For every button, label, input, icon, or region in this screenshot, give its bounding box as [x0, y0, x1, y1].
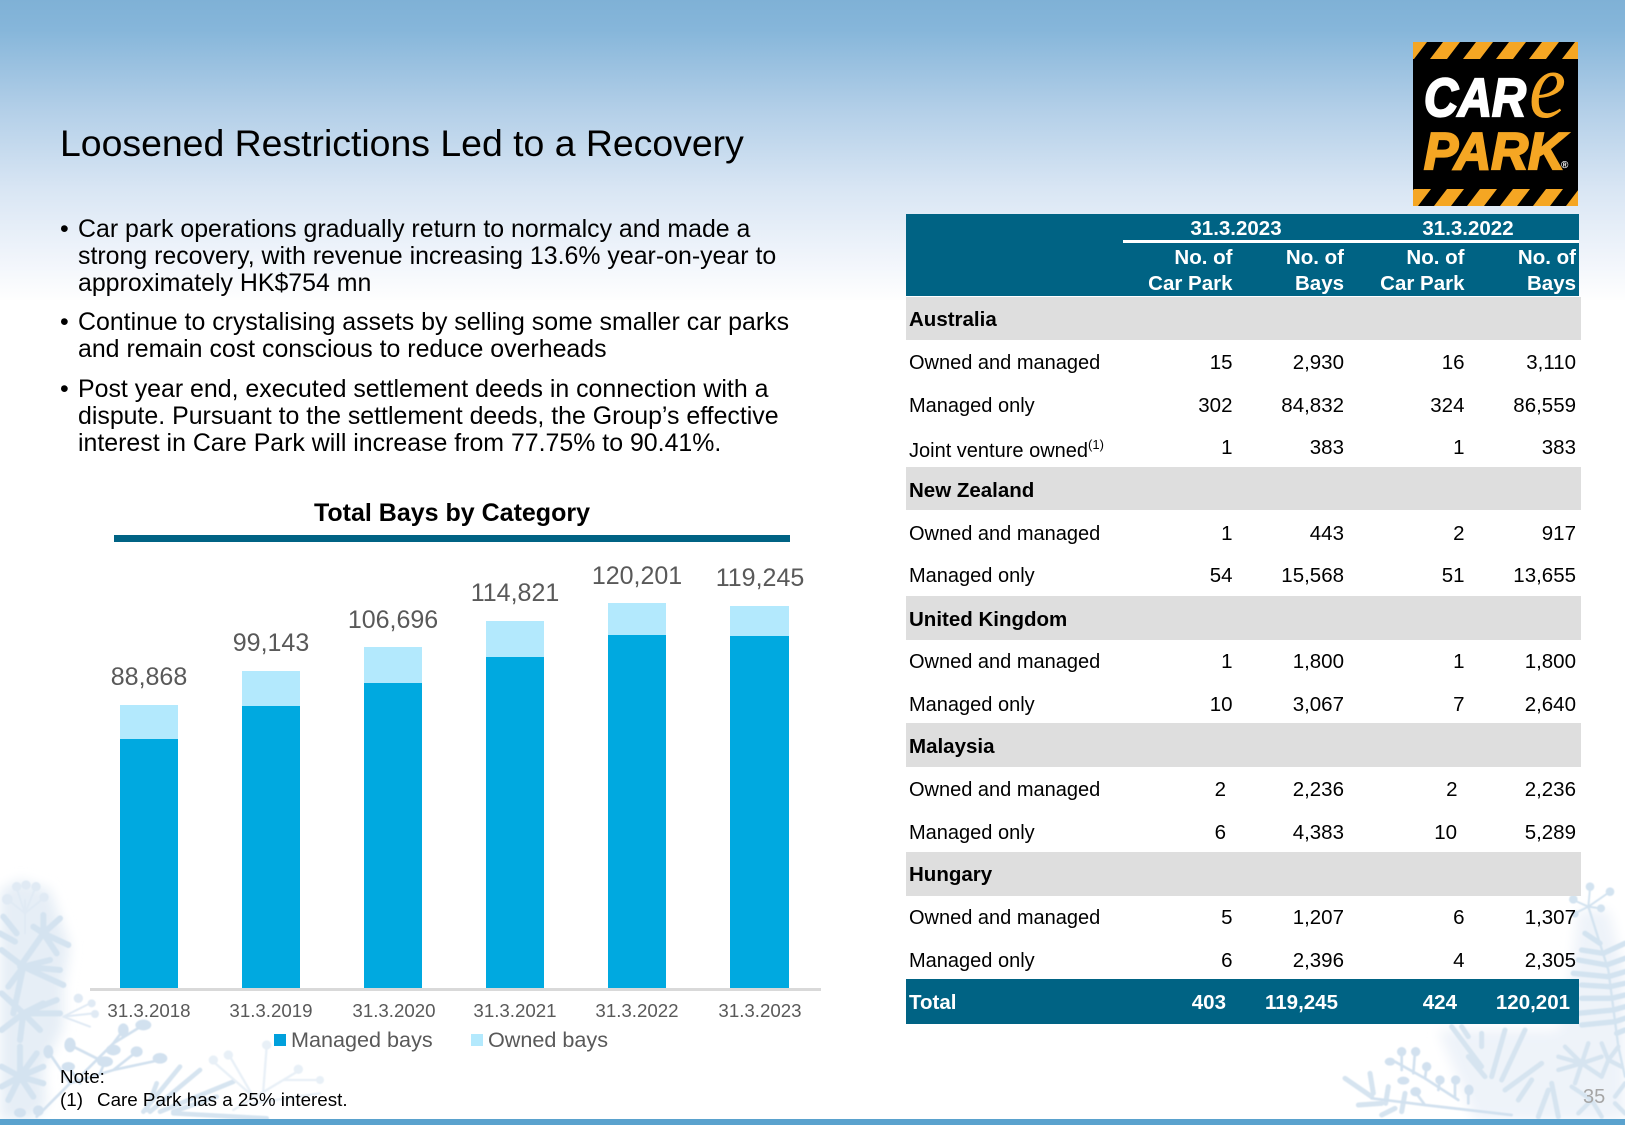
row: Malaysia managed only: 6	[1215, 821, 1226, 844]
bullet: crystalising assets: Continue to crystalising assets by selling some smaller car parks	[78, 308, 789, 336]
row: United Kingdom managed only: Managed only	[909, 694, 1035, 716]
legend: owned bays: Owned bays	[488, 1027, 608, 1052]
title: Loosened Restrictions Led to a Recovery	[60, 122, 744, 164]
row: Australia joint venture owned: 383	[1310, 436, 1344, 459]
page number: 35	[1583, 1086, 1605, 1108]
row: United Kingdom managed only: 3,067	[1293, 693, 1344, 716]
axis line	[90, 988, 821, 991]
row: United Kingdom	[906, 596, 1581, 640]
row: Malaysia owned and managed: 2	[1446, 778, 1458, 801]
header: no. of car park 2023	[1148, 246, 1232, 295]
bar 31.3.2023	[730, 606, 789, 988]
bar 31.3.2019	[242, 671, 300, 988]
row: Malaysia: Malaysia	[909, 735, 994, 758]
row: New Zealand managed only: 51	[1442, 564, 1464, 587]
row: New Zealand owned and managed: 1	[1221, 522, 1232, 545]
row: Hungary owned and managed: Owned and managed	[909, 907, 1100, 929]
row: Hungary	[906, 852, 1581, 896]
row: Malaysia owned and managed: 2,236	[1293, 778, 1344, 801]
row: Hungary owned and managed: 5	[1221, 906, 1232, 929]
row: United Kingdom owned and managed	[909, 650, 1576, 673]
row: United Kingdom owned and managed: 1,800	[1525, 650, 1576, 673]
header date 31.3.2023: 31.3.2023	[1190, 217, 1282, 240]
value label 99,143: 99,143	[233, 629, 309, 657]
row: Malaysia owned and managed: 2,236	[1525, 778, 1576, 801]
row: New Zealand managed only	[909, 564, 1576, 587]
bar 31.3.2021	[486, 621, 544, 988]
header rule	[1123, 240, 1579, 243]
row: New Zealand owned and managed: 917	[1542, 522, 1576, 545]
header date 31.3.2022: 31.3.2022	[1422, 217, 1514, 240]
chart heading: Total Bays by Category	[314, 499, 590, 527]
row: Total	[906, 979, 1579, 1024]
bullet: settlement deeds	[60, 375, 779, 457]
row: Australia owned and managed: 2,930	[1293, 351, 1344, 374]
row: United Kingdom managed only: 2,640	[1525, 693, 1576, 716]
row: New Zealand managed only: 54	[1210, 564, 1232, 587]
text: Care Park has a 25% interest.	[97, 1089, 348, 1110]
row: Hungary managed only: Managed only	[909, 950, 1035, 972]
bullet: crystalising assets: and remain cost conscious to reduce overheads	[78, 335, 607, 363]
axis label 31.3.2018: 31.3.2018	[107, 1000, 191, 1021]
header: no. of bays 2023: No. of	[1286, 246, 1344, 269]
row: Hungary managed only: 2,305	[1525, 949, 1576, 972]
row: Australia joint venture owned	[909, 436, 1576, 462]
row: Malaysia managed only: 10	[1434, 821, 1457, 844]
header: no. of bays 2022: Bays	[1527, 272, 1576, 295]
row: Hungary managed only: 4	[1453, 949, 1464, 972]
panel: car park table	[906, 214, 1581, 1024]
bullet: settlement deeds: Post year end, executed settlement deeds in connection with a	[78, 375, 768, 403]
value label 119,245: 119,245	[716, 564, 804, 592]
legend	[274, 1027, 608, 1052]
row: Malaysia managed only: 5,289	[1525, 821, 1576, 844]
bullet: car park recovery: •	[60, 214, 69, 242]
header: no. of car park 2023: Car Park	[1148, 272, 1232, 295]
row: Australia joint venture owned: 1	[1453, 436, 1464, 459]
axis label 31.3.2023: 31.3.2023	[718, 1000, 802, 1021]
row: Malaysia owned and managed: 2	[1215, 778, 1226, 801]
bullet: crystalising assets	[60, 308, 789, 363]
header: no. of bays 2023	[1286, 246, 1344, 295]
bullet: settlement deeds: dispute. Pursuant to the settlement deeds, the Group’s effective	[78, 402, 779, 430]
row: United Kingdom managed only: 10	[1210, 693, 1232, 716]
row: Australia owned and managed: 3,110	[1526, 351, 1576, 374]
value label 88,868: 88,868	[111, 663, 187, 691]
row: New Zealand owned and managed	[909, 522, 1576, 545]
row: New Zealand managed only: Managed only	[909, 565, 1035, 587]
row: United Kingdom owned and managed: Owned and managed	[909, 651, 1100, 673]
row: Hungary owned and managed: 6	[1453, 906, 1464, 929]
logo: Care Park: CAR	[1424, 68, 1526, 128]
value label 120,201: 120,201	[592, 562, 682, 590]
row: New Zealand managed only: 13,655	[1513, 564, 1576, 587]
footnote: Note:	[60, 1066, 105, 1087]
footnote	[60, 1066, 348, 1110]
row: Australia joint venture owned: 1	[1221, 436, 1232, 459]
row: Malaysia owned and managed: Owned and managed	[909, 779, 1100, 801]
row: United Kingdom owned and managed: 1,800	[1293, 650, 1344, 673]
row: Australia	[906, 297, 1581, 340]
header: no. of bays 2022	[1518, 246, 1576, 295]
row: Total: 424	[1423, 991, 1457, 1014]
logo: Care Park	[1413, 42, 1578, 206]
header: no. of car park 2023: No. of	[1174, 246, 1232, 269]
row: Australia managed only: Managed only	[909, 395, 1035, 417]
row: Total: 119,245	[1265, 991, 1338, 1014]
row: Australia managed only: 84,832	[1281, 394, 1344, 417]
row: Total: 120,201	[1496, 991, 1570, 1014]
legend: managed bays: Managed bays	[291, 1027, 433, 1052]
row: Australia owned and managed: 16	[1442, 351, 1464, 374]
row: Australia managed only: 324	[1430, 394, 1464, 417]
footnote: (1)	[60, 1089, 83, 1110]
header: no. of car park 2022: No. of	[1406, 246, 1464, 269]
bottom bar	[0, 1119, 1625, 1125]
bullet: crystalising assets: •	[60, 308, 69, 336]
row: Malaysia owned and managed	[909, 778, 1576, 801]
row: Australia owned and managed: 15	[1210, 351, 1232, 374]
header: no. of car park 2022	[1380, 246, 1464, 295]
row: Total: Total	[909, 991, 956, 1014]
row: Hungary managed only: 2,396	[1293, 949, 1344, 972]
axis label 31.3.2020: 31.3.2020	[352, 1000, 436, 1021]
row: Malaysia	[906, 723, 1581, 767]
header: no. of bays 2023: Bays	[1295, 272, 1344, 295]
row: Hungary owned and managed: 1,307	[1525, 906, 1576, 929]
bullet: car park recovery: Car park operations gradually return to normalcy and made a	[78, 214, 750, 242]
row: New Zealand owned and managed: Owned and managed	[909, 523, 1100, 545]
heading rule	[114, 535, 790, 542]
bullet list	[60, 214, 789, 457]
bar 31.3.2018	[120, 705, 178, 988]
row: Australia owned and managed	[909, 351, 1576, 374]
row: New Zealand owned and managed: 2	[1453, 522, 1464, 545]
row: Australia: Australia	[909, 308, 997, 331]
row: United Kingdom owned and managed: 1	[1221, 650, 1232, 673]
row: New Zealand owned and managed: 443	[1310, 522, 1344, 545]
row: United Kingdom owned and managed: 1	[1453, 650, 1464, 673]
row: Malaysia managed only: Managed only	[909, 822, 1035, 844]
row: New Zealand: New Zealand	[909, 479, 1034, 502]
value label 114,821: 114,821	[471, 579, 559, 607]
axis label 31.3.2022: 31.3.2022	[595, 1000, 679, 1021]
row: Australia managed only: 86,559	[1513, 394, 1576, 417]
row: Australia joint venture owned: 383	[1542, 436, 1576, 459]
row: Australia managed only	[909, 394, 1576, 417]
row: Hungary: Hungary	[909, 863, 992, 886]
row: Hungary owned and managed	[909, 906, 1576, 929]
logo: Care Park: PARK	[1424, 123, 1568, 181]
row: Australia managed only: 302	[1198, 394, 1232, 417]
bullet: car park recovery	[60, 214, 776, 297]
row: Australia joint venture owned: Joint venture owned(1)	[909, 437, 1104, 462]
header: no. of car park 2022: Car Park	[1380, 272, 1464, 295]
table header band	[906, 214, 1579, 296]
row: Hungary managed only: 6	[1221, 949, 1232, 972]
bullet: settlement deeds: •	[60, 375, 69, 403]
row: New Zealand	[906, 467, 1581, 510]
bullet: car park recovery: approximately HK$754 mn	[78, 269, 371, 297]
logo: Care Park: ®	[1561, 160, 1569, 171]
axis label 31.3.2019: 31.3.2019	[229, 1000, 313, 1021]
bar 31.3.2020	[364, 647, 422, 988]
row: United Kingdom: United Kingdom	[909, 608, 1067, 631]
row: Malaysia managed only: 4,383	[1293, 821, 1344, 844]
axis label 31.3.2021: 31.3.2021	[473, 1000, 557, 1021]
header: no. of bays 2022: No. of	[1518, 246, 1576, 269]
bullet: settlement deeds: interest in Care Park will increase from 77.75% to 90.41%.	[78, 429, 721, 457]
row: United Kingdom managed only	[909, 693, 1576, 716]
bar 31.3.2022	[608, 603, 666, 988]
row: Total: 403	[1192, 991, 1226, 1014]
row: Malaysia managed only	[909, 821, 1576, 844]
row: Hungary owned and managed: 1,207	[1293, 906, 1344, 929]
value label 106,696: 106,696	[348, 606, 438, 634]
row: New Zealand managed only: 15,568	[1281, 564, 1344, 587]
row: Australia owned and managed: Owned and managed	[909, 352, 1100, 374]
bullet: car park recovery: strong recovery, with revenue increasing 13.6% year-on-year to	[78, 242, 776, 270]
row: United Kingdom managed only: 7	[1453, 693, 1464, 716]
panel: bar chart total bays by category	[90, 499, 821, 1052]
row: Hungary managed only	[909, 949, 1576, 972]
